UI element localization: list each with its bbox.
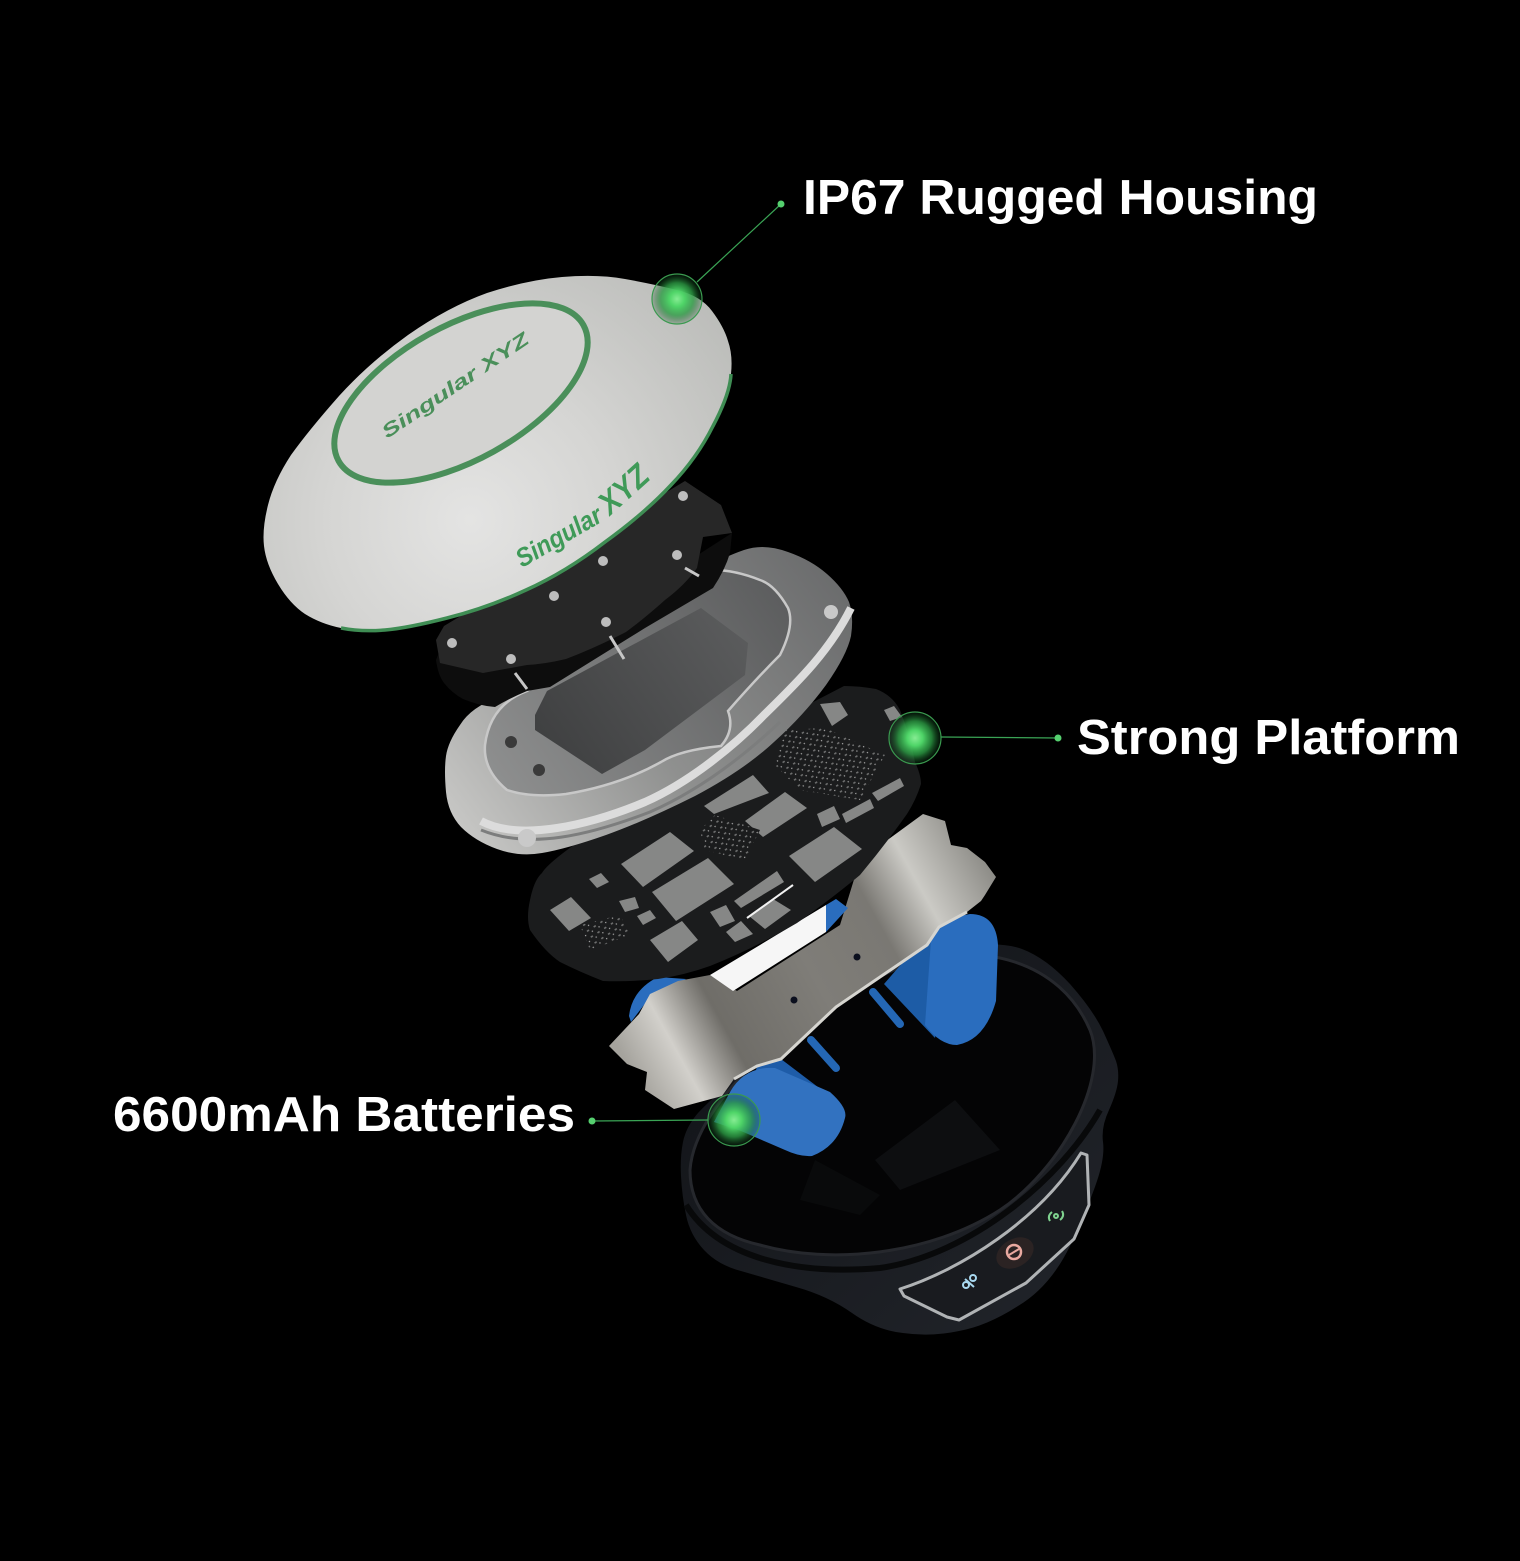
inner recess bbox=[485, 570, 790, 795]
callout: Strong Platform: Strong Platform bbox=[1077, 711, 1460, 765]
logo top: Singular XYZ bbox=[378, 328, 535, 443]
logo ring bbox=[306, 267, 616, 519]
metal chassis bbox=[445, 547, 852, 854]
callout: IP67 Rugged Housing: IP67 Rugged Housing bbox=[803, 171, 1318, 225]
logo front: XYZ: XYZ bbox=[589, 456, 657, 522]
callout: 6600mAh Batteries: 6600mAh Batteries bbox=[113, 1088, 575, 1142]
cavity bbox=[690, 955, 1094, 1255]
right battery bbox=[884, 914, 998, 1045]
recess floor bbox=[535, 608, 748, 774]
bright rim bbox=[481, 608, 851, 831]
circuit board bbox=[528, 686, 921, 981]
logo front: Singular: Singular bbox=[510, 499, 609, 573]
black antenna plate bbox=[436, 481, 732, 707]
front battery bbox=[714, 1068, 845, 1156]
icon: bluetooth indicator bbox=[963, 1275, 976, 1288]
icon: signal indicator bbox=[1049, 1211, 1063, 1221]
callout: 6600mAh Batteries bbox=[113, 1088, 760, 1146]
white cutout bbox=[710, 905, 826, 991]
studs bbox=[505, 605, 838, 847]
white housing dome bbox=[264, 267, 732, 631]
left battery bbox=[629, 977, 686, 1022]
metal battery bracket bbox=[609, 814, 996, 1109]
rear battery body bbox=[741, 1059, 835, 1150]
receiver base shell bbox=[681, 944, 1118, 1335]
callout: IP67 Rugged Housing bbox=[652, 171, 1318, 324]
control panel bbox=[900, 1153, 1089, 1320]
connector pins bbox=[811, 992, 900, 1068]
callout: Strong Platform bbox=[889, 711, 1460, 765]
icon: power button bbox=[991, 1231, 1039, 1275]
